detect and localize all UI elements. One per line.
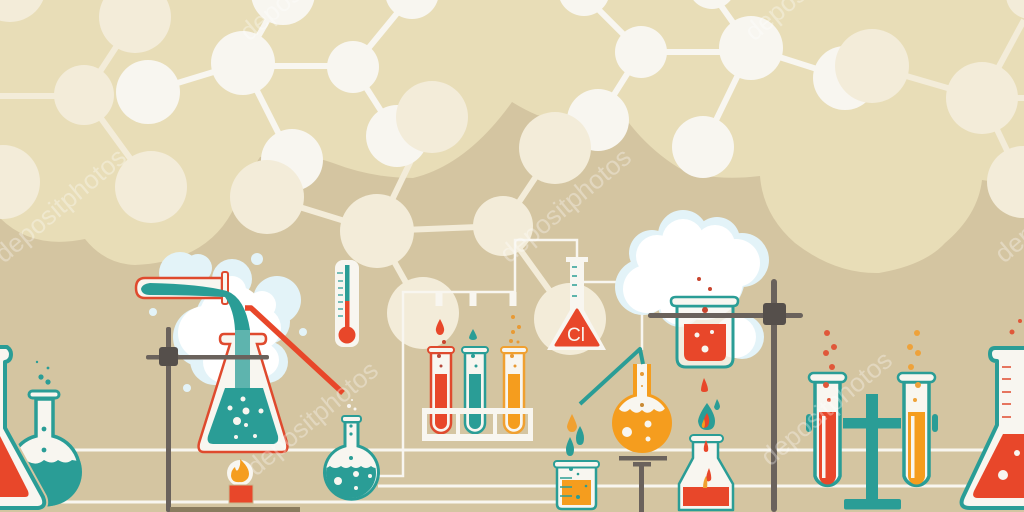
red test tube [428,319,454,433]
flame and drops above narrow bottle [698,378,720,430]
clamp block [763,303,786,325]
right retort stand [648,279,803,512]
left steam cloud [149,252,307,392]
thermometer [335,260,359,347]
right steam cloud [615,210,769,359]
pouring test tube [136,272,250,330]
orange round flask on stand [612,364,672,512]
molecule atoms, white [116,0,877,191]
molecule atoms, cream [0,0,1024,355]
stock-photo watermarks: depositphotos [494,142,637,269]
right test tube stand [806,394,938,510]
lab pipework [378,240,642,476]
right orange test tube [898,330,935,485]
orange test tube [501,315,527,433]
left clamp arm [146,347,269,366]
teal test tube [462,329,488,433]
stock-photo watermarks: depositphotos [241,355,384,482]
chlorine flask [547,257,606,350]
lab bench lines [0,450,1024,502]
molecule bonds, light [0,18,1024,319]
teal round flask [323,399,380,501]
right red test tube [809,330,846,485]
burner with flame [227,459,253,503]
right-edge large conical flask [962,319,1024,508]
narrow-neck red bottle [679,435,733,510]
left retort stand [166,327,300,512]
white test tube rack [422,408,533,441]
falling drops [566,414,584,456]
molecule network [0,0,1024,355]
left-edge teal round flask [18,360,82,506]
test tubes in rack [422,315,533,441]
stock-photo watermarks: depositphotos [755,345,898,472]
hanging red beaker [648,277,763,367]
large conical flask with teal liquid [199,330,287,452]
background cream cloud [0,0,1024,273]
chlorine flask: Cl [567,325,585,346]
teal delivery tube [580,349,643,404]
left-edge large conical flask [0,347,44,508]
small orange beaker [554,461,599,509]
molecule bonds, white [148,0,845,160]
red delivery pipe [245,308,343,393]
